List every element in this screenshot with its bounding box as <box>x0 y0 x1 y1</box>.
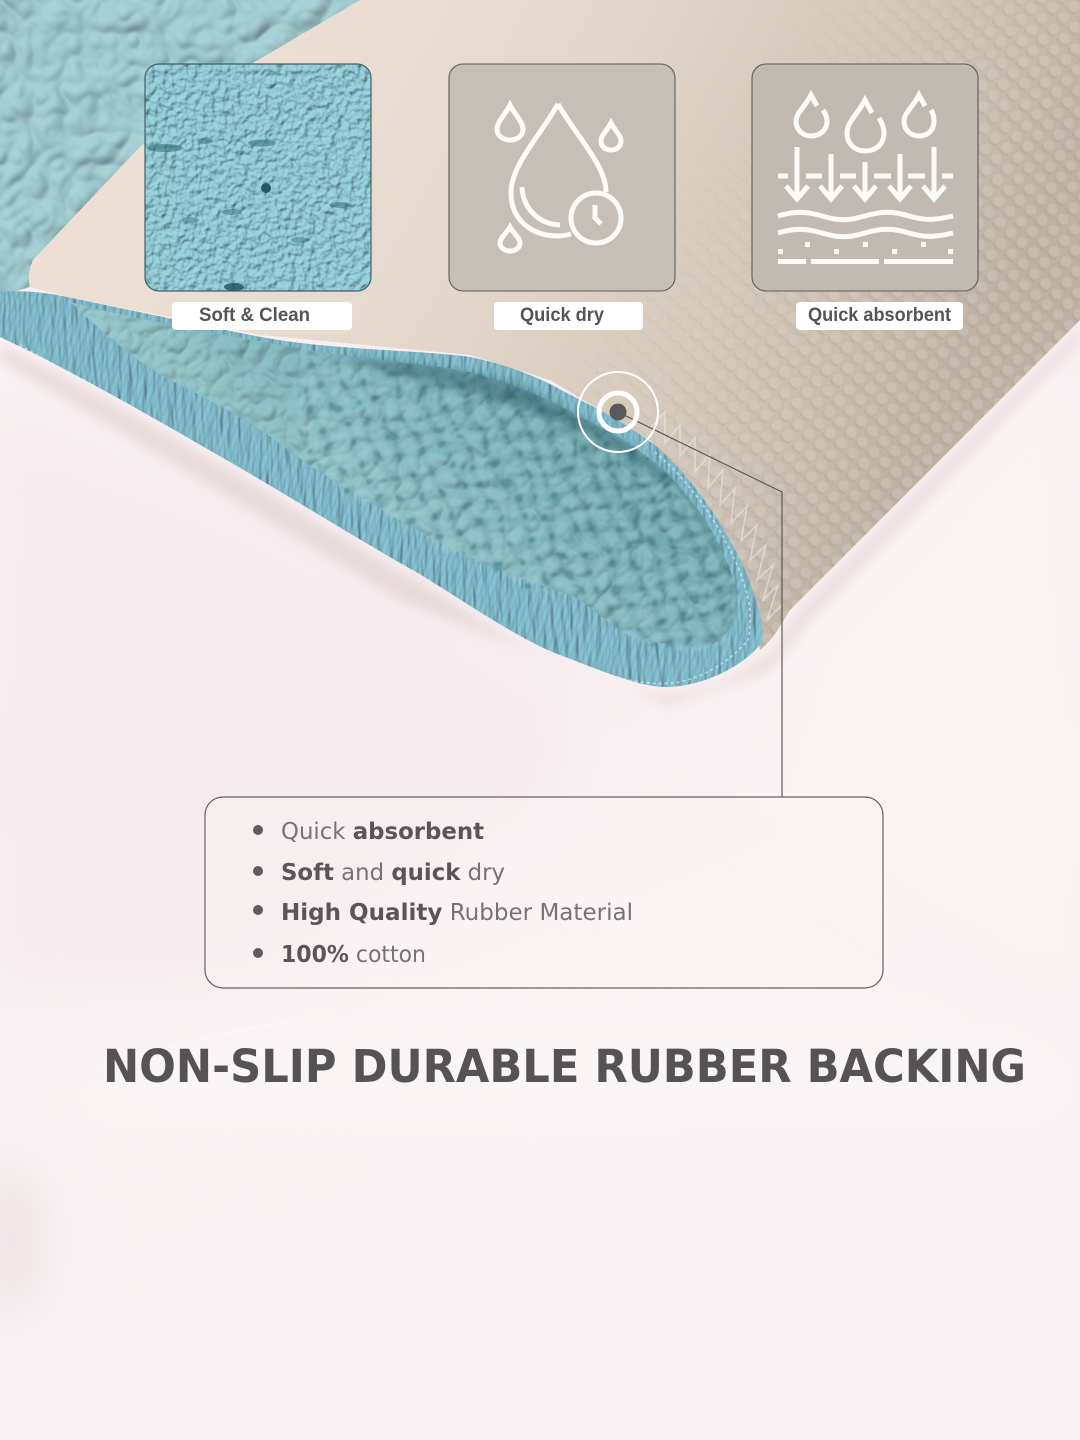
bath mat photo <box>0 0 1080 705</box>
label: quick dry <box>494 302 643 330</box>
five arrows <box>786 147 945 199</box>
label: quick absorbent <box>796 302 963 330</box>
label: quick dry: Quick dry <box>520 305 604 326</box>
callout panel: feature list <box>205 797 883 988</box>
mat blue rim <box>0 291 763 687</box>
icon: drops absorbed through layers <box>778 95 953 264</box>
three drops <box>796 95 934 151</box>
heading: NON-SLIP DURABLE RUBBER BACKING <box>103 1040 1026 1093</box>
mat top pile <box>0 0 362 296</box>
feature card: quick dry <box>449 64 675 330</box>
waves <box>778 212 953 237</box>
bullet: 100% cotton: 100% cotton <box>281 942 426 968</box>
callout marker and leader line <box>578 372 782 797</box>
feature card: soft and clean <box>145 64 371 330</box>
label: soft and clean: Soft & Clean <box>199 305 310 326</box>
mat beige rubber backing <box>29 0 1080 650</box>
mat folded pile underside <box>70 302 738 651</box>
icon: water drop with clock <box>497 104 621 251</box>
bullet: soft and quick dry: Soft and quick dry <box>281 860 505 886</box>
label: soft and clean <box>172 302 352 330</box>
bullet: high quality rubber material: High Quality Rubber Material <box>281 900 633 926</box>
label: quick absorbent: Quick absorbent <box>808 305 952 326</box>
feature card: quick absorbent <box>752 64 978 330</box>
stitched zigzag edge <box>650 412 782 620</box>
bullet: quick absorbent: Quick absorbent <box>281 819 484 845</box>
dashed line <box>778 174 953 178</box>
mat shadow <box>0 330 1080 705</box>
mat edge seams <box>20 345 750 684</box>
dots and bars <box>778 242 953 264</box>
shadow under fold <box>340 358 680 487</box>
swatch: teal pile texture <box>145 64 371 291</box>
